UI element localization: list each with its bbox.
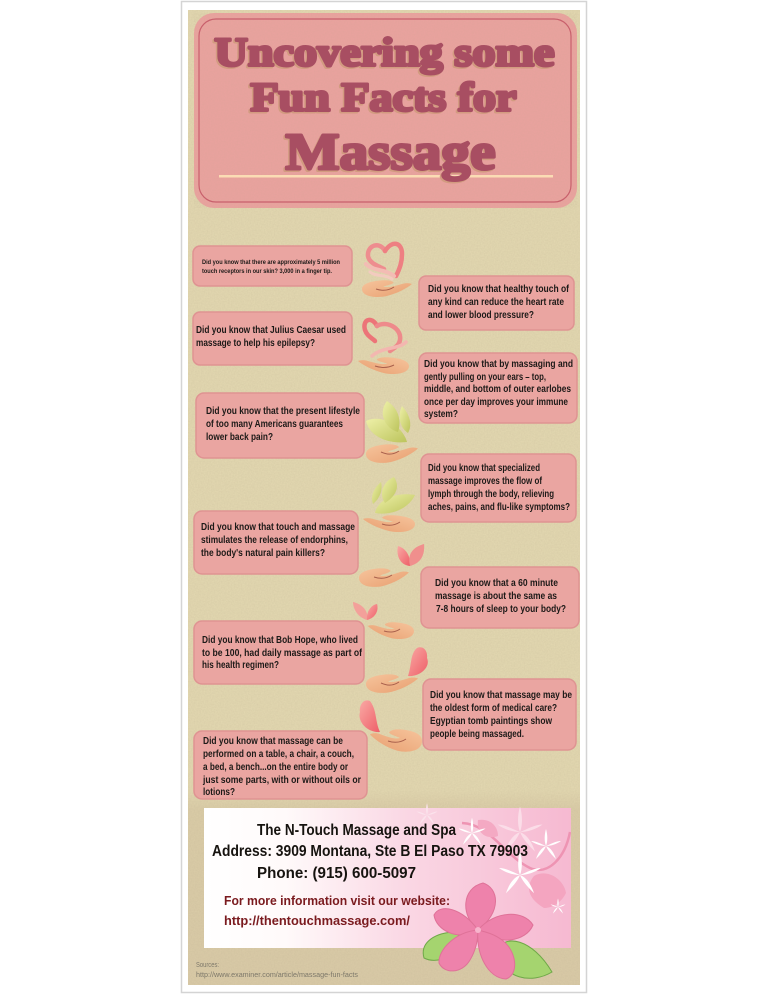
fact 10: [423, 679, 576, 750]
fact 9: Did you know that Bob Hope, who lived: [202, 635, 358, 646]
panel: contact information: [204, 803, 571, 948]
fact 6: Did you know that specialized: [428, 463, 540, 474]
fact 9: his health regimen?: [202, 660, 279, 671]
icon: hand with leaves 2: [363, 477, 415, 532]
fact 8: [421, 567, 579, 628]
fact 8: 7-8 hours of sleep to your body?: [436, 604, 566, 615]
icon: hand with petal 2: [360, 700, 422, 752]
fact 7: [194, 511, 358, 574]
fact 9: [194, 621, 364, 684]
title text: Massage: [286, 124, 496, 181]
fact 1: [193, 246, 352, 286]
fact 2: Did you know that healthy touch of: [428, 284, 570, 295]
fact 5: [196, 393, 364, 458]
icon: hand with heart 1: [362, 244, 412, 297]
fact 10: the oldest form of medical care?: [430, 703, 557, 714]
icon: hand with heart 2: [358, 320, 409, 374]
fact 9: to be 100, had daily massage as part of: [202, 648, 363, 659]
icon: hand with butterfly 1: [359, 544, 424, 587]
title text: Uncovering some: [214, 30, 554, 74]
icon: hand with leaves 1: [366, 401, 418, 463]
fact 3: Did you know that Julius Caesar used: [196, 325, 346, 336]
sources: http://www.examiner.com/article/massage-fun-facts: [196, 972, 359, 979]
fact 7: stimulates the release of endorphins,: [201, 535, 348, 546]
title text: Massage: [284, 126, 494, 182]
fact 11: lotions?: [203, 787, 235, 798]
fact 7: the body's natural pain killers?: [201, 548, 325, 559]
fact 11: Did you know that massage can be: [203, 736, 343, 747]
fact 10: Egyptian tomb paintings show: [430, 716, 552, 727]
fact 5: Did you know that the present lifestyle: [206, 406, 360, 417]
sand background panel: [188, 10, 580, 985]
icon: hand with petal 1: [366, 647, 428, 693]
fact 10: people being massaged.: [430, 729, 524, 740]
fact 6: [421, 454, 576, 522]
contact details: Phone: (915) 600-5097: [257, 865, 416, 882]
contact details: [212, 822, 528, 882]
icon: hand with butterfly 2: [353, 602, 414, 639]
fact 2: any kind can reduce the heart rate: [428, 297, 564, 308]
fact 8: massage is about the same as: [435, 591, 557, 602]
fact 11: just some parts, with or without oils or: [202, 775, 361, 786]
fact 1: touch receptors in our skin? 3,000 in a finger tip.: [202, 268, 332, 275]
sources: [196, 962, 359, 979]
fact 7: Did you know that touch and massage: [201, 522, 355, 533]
fact 2: and lower blood pressure?: [428, 310, 534, 321]
fact 5: lower back pain?: [206, 432, 273, 443]
panel: title banner: [194, 13, 577, 208]
fact 6: massage improves the flow of: [428, 476, 543, 487]
icon: pink flower: [423, 883, 552, 979]
fact 4: Did you know that by massaging and: [424, 359, 573, 370]
contact details: The N-Touch Massage and Spa: [257, 822, 456, 839]
fact 4: [419, 353, 577, 423]
title text: [213, 30, 554, 182]
fact 4: middle, and bottom of outer earlobes: [424, 384, 571, 395]
fact 1: Did you know that there are approximately 5 million: [202, 259, 340, 266]
fact 6: aches, pains, and flu-like symptoms?: [428, 502, 570, 513]
fact 2: [419, 276, 574, 330]
fact 10: Did you know that massage may be: [430, 690, 572, 701]
fact 3: massage to help his epilepsy?: [196, 338, 315, 349]
fact 11: [194, 731, 367, 799]
fact 11: performed on a table, a chair, a couch,: [203, 749, 354, 760]
fact 4: system?: [424, 409, 458, 420]
website call to action: http://thentouchmassage.com/: [224, 913, 410, 928]
fact 11: a bed, a bench...on the entire body or: [203, 762, 348, 773]
fact 5: of too many Americans guarantees: [206, 419, 343, 430]
fact 4: once per day improves your immune: [424, 397, 568, 408]
title underline: [219, 175, 553, 178]
fact 8: Did you know that a 60 minute: [435, 578, 558, 589]
title text: Fun Facts for: [249, 76, 515, 121]
sources: Sources:: [196, 962, 219, 969]
title text: Uncovering some: [213, 31, 553, 76]
decorative floral swirl: [416, 803, 570, 914]
website call to action: [224, 893, 450, 928]
fact 4: gently pulling on your ears – top,: [424, 372, 546, 383]
website call to action: For more information visit our website:: [224, 893, 450, 908]
contact details: Address: 3909 Montana, Ste B El Paso TX 79903: [212, 843, 528, 860]
page frame: [182, 2, 586, 992]
fact 3: [193, 312, 352, 365]
fact 6: lymph through the body, relieving: [428, 489, 554, 500]
title text: Fun Facts for: [250, 74, 516, 120]
